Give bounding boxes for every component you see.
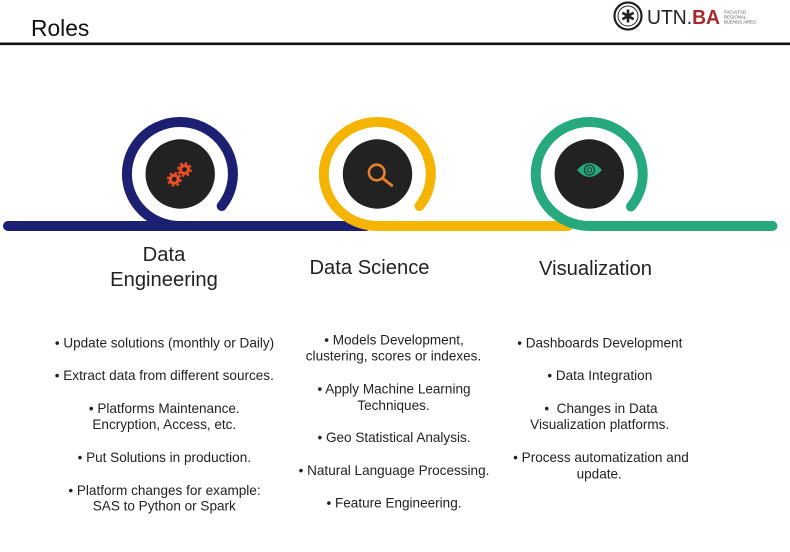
text block: data engineering tasks: SAS to Python or Spark — [93, 498, 236, 514]
text block: visualization tasks: • Data Integration — [547, 368, 652, 383]
text block: data science tasks — [299, 332, 489, 510]
text block: data engineering tasks — [55, 336, 274, 514]
text block: data science tasks: • Apply Machine Learning — [317, 381, 471, 396]
icon: magnifier on dark circle — [343, 139, 412, 209]
icon: gears on dark circle — [146, 139, 215, 209]
text block: data science tasks: • Models Development, — [324, 332, 464, 347]
text block: visualization tasks: Visualization platforms. — [530, 417, 669, 432]
logo: UTN.BA: UTN.BA — [647, 7, 720, 29]
text block: data engineering tasks: • Put Solutions in production. — [78, 450, 251, 465]
text block: visualization tasks: • Changes in Data — [544, 401, 658, 416]
text block: data engineering tasks: • Update solutions (monthly or Daily) — [55, 336, 274, 351]
icon: eye on dark circle — [555, 139, 624, 209]
timeline: visualization ribbon — [536, 122, 772, 226]
text block: data science tasks: • Natural Language Processing. — [299, 463, 489, 478]
logo: UTN.BA: REGIONAL — [724, 14, 747, 20]
heading: Data Engineering: Engineering — [110, 269, 218, 291]
text block: data engineering tasks: • Platforms Maintenance. — [89, 401, 240, 416]
text block: data engineering tasks: • Extract data from different sources. — [55, 368, 274, 383]
text block: visualization tasks: • Dashboards Development — [517, 336, 683, 351]
text block: data science tasks: clustering, scores or indexes. — [306, 349, 481, 364]
timeline: data science ribbon — [324, 122, 568, 226]
text block: data engineering tasks: • Platform changes for example: — [68, 483, 261, 498]
text block: visualization tasks: • Process automatization and — [513, 450, 689, 465]
text block: visualization tasks — [513, 336, 689, 481]
logo: UTN.BA: BUENOS AIRES — [724, 20, 756, 24]
timeline: data engineering ribbon — [8, 122, 366, 226]
text block: data science tasks: Techniques. — [357, 398, 430, 413]
logo: UTN.BA — [614, 2, 756, 30]
text block: data engineering tasks: Encryption, Access, etc. — [92, 417, 236, 432]
logo: UTN.BA: FACULTAD — [724, 10, 746, 14]
heading: Visualization: Visualization — [539, 258, 652, 280]
text block: visualization tasks: update. — [577, 466, 622, 481]
text block: data science tasks: • Geo Statistical Analysis. — [317, 430, 471, 445]
heading: Data Science: Data Science — [309, 257, 430, 279]
title: Roles — [31, 15, 89, 41]
heading: Data Engineering: Data — [143, 244, 186, 266]
text block: data science tasks: • Feature Engineering. — [326, 495, 462, 510]
